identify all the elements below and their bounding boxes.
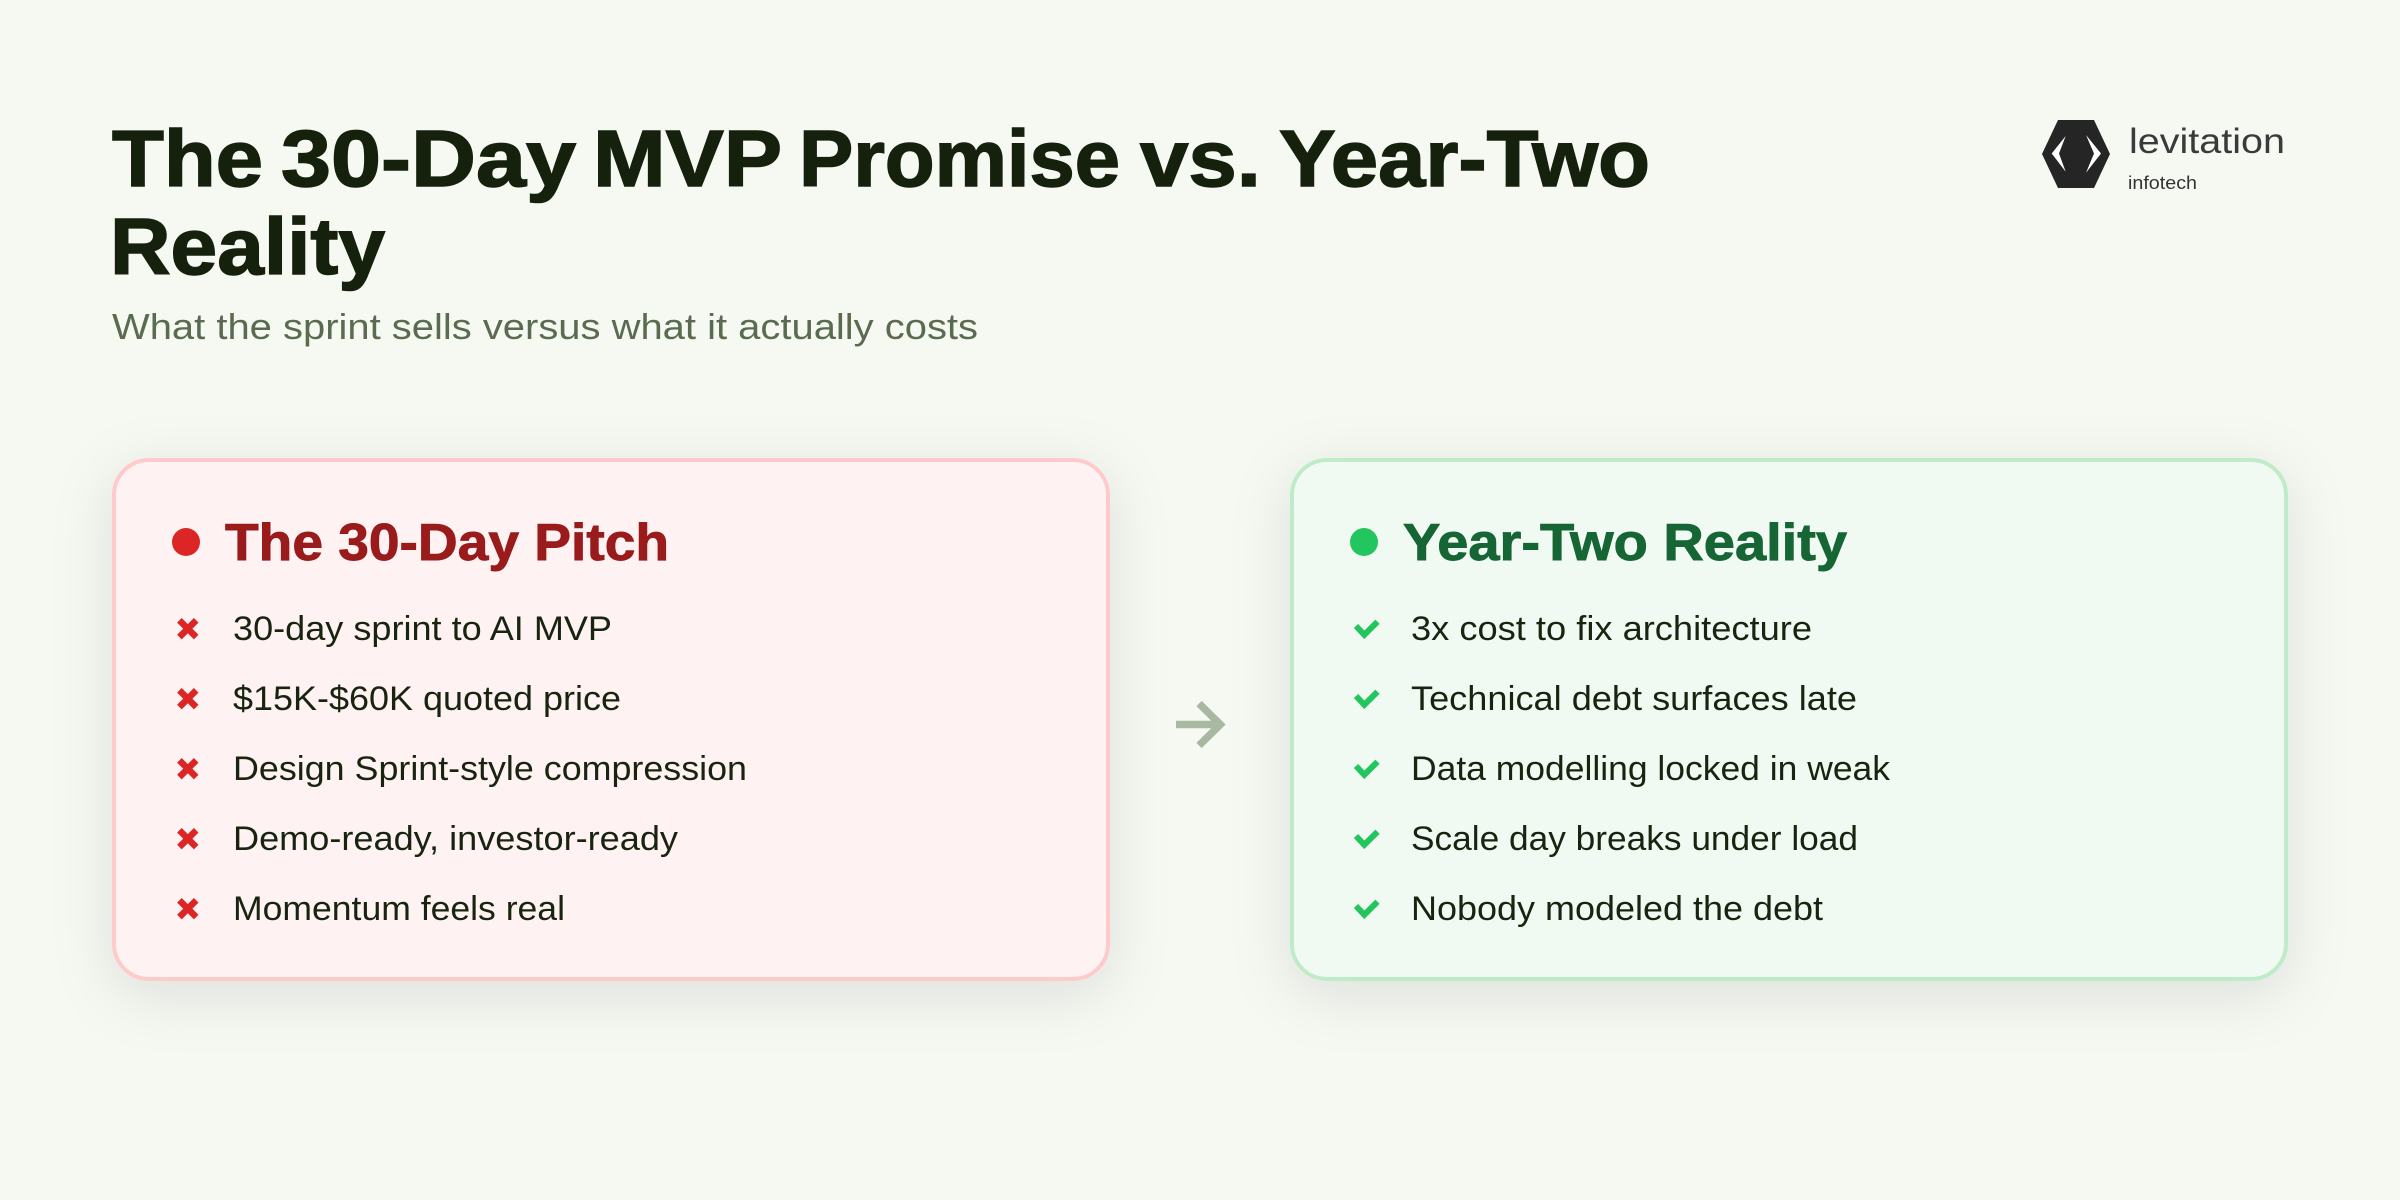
wordmark	[2128, 122, 2285, 193]
list item: technical debt: Technical debt surfaces late	[1411, 680, 1857, 718]
arrow	[1176, 704, 1220, 746]
logo: levitation infotech	[2042, 120, 2285, 193]
list item: 30-day sprint: 30-day sprint to AI MVP	[233, 610, 612, 648]
icon: hexagon with chevrons	[2042, 120, 2110, 188]
panel: year-two reality	[1292, 460, 2286, 979]
title: The	[112, 114, 263, 203]
wordmark: infotech	[2128, 173, 2197, 193]
title: MVP	[593, 114, 782, 203]
list item: scale day: Scale day breaks under load	[1411, 820, 1858, 858]
subtitle: What the sprint sells versus what it actually costs	[112, 306, 978, 347]
list item: demo-ready: Demo-ready, investor-ready	[233, 820, 678, 858]
list item: design sprint: Design Sprint-style compression	[233, 750, 747, 788]
list item: momentum: Momentum feels real	[233, 890, 565, 928]
title	[110, 114, 1650, 291]
heading: year-two reality: Year-Two Reality	[1403, 514, 1847, 572]
title: Reality	[110, 202, 386, 291]
panel: the 30-day pitch	[114, 460, 1108, 979]
heading: the 30-day pitch: The 30-Day Pitch	[225, 514, 669, 572]
list item: quoted price: $15K-$60K quoted price	[233, 680, 621, 718]
title: 30-Day	[281, 114, 577, 203]
list item: 3x cost: 3x cost to fix architecture	[1411, 610, 1812, 648]
title: vs.	[1140, 114, 1261, 203]
status dot: green	[1350, 528, 1378, 556]
title: Promise	[799, 114, 1120, 203]
list item: data modelling: Data modelling locked in weak	[1411, 750, 1891, 788]
wordmark: levitation	[2129, 122, 2285, 161]
list item: nobody modeled: Nobody modeled the debt	[1411, 890, 1824, 928]
title: Year-Two	[1279, 114, 1650, 203]
status dot: red	[172, 528, 200, 556]
